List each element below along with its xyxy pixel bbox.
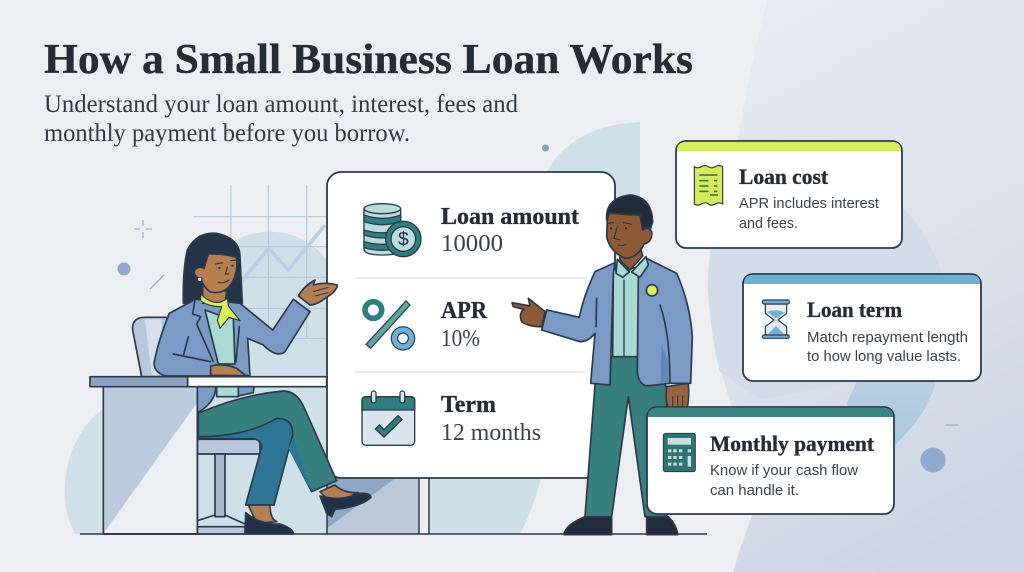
text: loan term description: to how long value lasts.: [807, 349, 961, 365]
label: APR: [441, 297, 487, 352]
icon: percent: [365, 301, 415, 350]
icon: coins with dollar: [364, 204, 421, 257]
icon: receipt: [694, 165, 723, 205]
hand on card: [666, 383, 689, 407]
hands: [211, 280, 337, 376]
icon: calendar: [362, 391, 415, 445]
text: monthly payment description: can handle it.: [710, 483, 799, 499]
subtitle: Understand your loan amount, interest, fees and: [44, 91, 518, 118]
label: loan amount: 10000: [441, 231, 503, 257]
label: term: 12 months: [441, 420, 541, 446]
text: loan cost description: [739, 196, 879, 232]
text: monthly payment description: Know if your cash flow: [710, 463, 859, 479]
icon: hourglass: [762, 300, 789, 338]
shirt: [613, 267, 646, 357]
text: loan term description: Match repayment length: [807, 330, 968, 346]
decorative accents: [118, 144, 958, 472]
hair: [183, 233, 242, 303]
label: APR: 10%: [441, 326, 480, 352]
head and neck: [194, 254, 237, 303]
chair: [133, 317, 260, 534]
jacket: [542, 258, 692, 386]
text: loan cost description: and fees.: [739, 216, 798, 232]
label: loan amount: Loan amount: [441, 203, 580, 230]
heading: loan cost: Loan cost: [739, 164, 829, 189]
text: loan cost description: APR includes interest: [739, 196, 879, 212]
shoes: [245, 485, 371, 534]
illustration: woman at desk: [90, 233, 371, 534]
subtitle: monthly payment before you borrow.: [44, 120, 410, 147]
title: How a Small Business Loan Works: [44, 37, 693, 83]
jacket hem: [197, 387, 216, 413]
card stand: [327, 478, 590, 534]
scarf: [201, 294, 240, 328]
label: term: Term: [441, 391, 496, 418]
label: loan amount: [441, 203, 580, 257]
icon: calculator: [663, 433, 695, 472]
label: APR: APR: [441, 297, 487, 324]
text: loan term description: [807, 330, 968, 365]
heading: loan term: Loan term: [807, 297, 902, 322]
subtitle: [44, 91, 518, 147]
heading: monthly payment: Monthly payment: [710, 431, 875, 456]
icon: coins with dollar: $: [398, 230, 409, 251]
floor line: [80, 533, 707, 535]
badge: [646, 285, 658, 296]
panel: loan inputs: [327, 172, 615, 478]
hand pointing: [512, 298, 545, 327]
label: term: [441, 391, 541, 446]
panel: loan term: [743, 274, 981, 381]
jacket torso and arm: [154, 299, 310, 376]
illustration: man pointing: [512, 195, 692, 535]
text: monthly payment description: [710, 463, 859, 499]
legs: [198, 391, 337, 505]
desk: [90, 377, 327, 534]
panel: monthly payment: [647, 407, 894, 514]
panel: loan cost: [676, 141, 902, 248]
head: [607, 195, 653, 258]
neck and collar: [616, 247, 648, 277]
trousers: [585, 357, 667, 517]
shoes: [564, 517, 678, 535]
background chart: [193, 185, 342, 534]
